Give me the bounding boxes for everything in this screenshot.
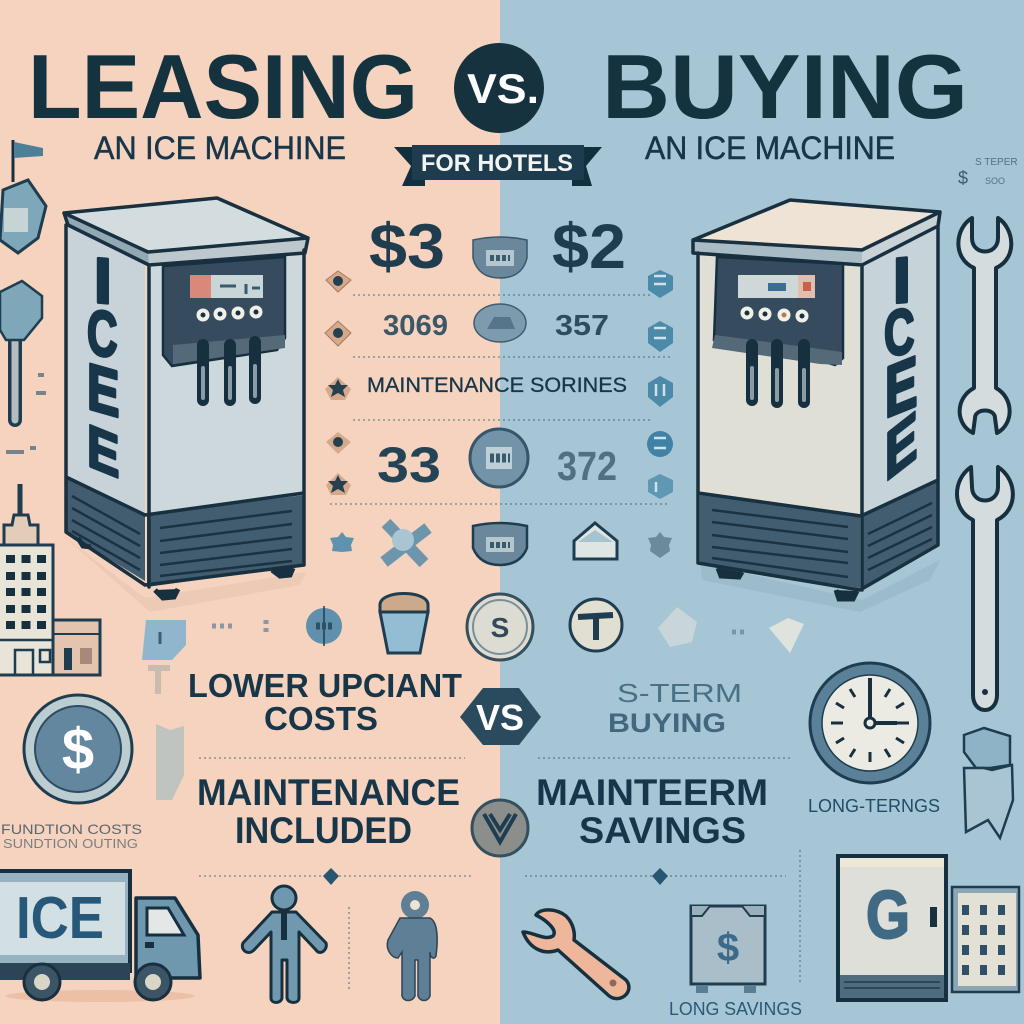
machine label: I [94, 244, 112, 318]
label: maintenance services: MAINTENANCE SORINES [367, 374, 627, 397]
icon: tag [473, 523, 527, 565]
text: maintenance included: MAINTENANCE [197, 772, 460, 813]
subtitle: leasing: AN ICE MACHINE [94, 130, 346, 166]
icon: dollar coin large: $ [62, 717, 94, 782]
icon: tools [384, 523, 428, 563]
machine feet [718, 568, 857, 599]
icon: figure right [964, 728, 1013, 838]
text: long-term buying: BUYING [608, 708, 726, 738]
panel: leasing background [0, 0, 500, 1024]
figure: 33: 33 [377, 437, 441, 493]
badge: vs arrow: VS [476, 697, 524, 738]
machine label: E [885, 341, 917, 434]
caption: top right fine print: $ [958, 168, 968, 188]
caption: long-terms: LONG-TERNGS [808, 796, 940, 816]
icon: coin small [306, 606, 342, 646]
icon: ice chunk [658, 607, 697, 647]
icon: person with tie [242, 886, 326, 1002]
subtitle: buying: AN ICE MACHINE [645, 130, 895, 166]
icon: dollar coin large [24, 695, 132, 803]
icon: emblem [472, 800, 528, 856]
ribbon: for hotels: FOR HOTELS [421, 150, 573, 177]
caption: top right fine print: S TEPER [975, 157, 1018, 168]
machine label: E [885, 395, 917, 497]
ribbon: for hotels [394, 145, 602, 186]
figure: $2: $2 [552, 212, 626, 282]
figure: 372: 372 [557, 443, 617, 489]
icon: pale figure left [156, 724, 184, 800]
caption: long savings: LONG SAVINGS [669, 999, 802, 1019]
icon: clock [810, 663, 930, 783]
icon: cost badge [473, 237, 527, 278]
machine label: I [893, 244, 911, 317]
figure: 3069: 3069 [383, 310, 448, 342]
icon: ice delivery truck: ICE [16, 885, 104, 951]
text: long-term buying [608, 678, 742, 738]
icon: ice delivery truck [0, 871, 200, 1002]
icon: machine g: G [866, 877, 910, 953]
machine label [87, 244, 119, 491]
title: buying: BUYING [602, 37, 968, 138]
machine label: E [87, 411, 119, 491]
icon: valve dial [570, 599, 622, 651]
icons: second row [142, 594, 804, 694]
caption: fine print: FUNDTION COSTS [1, 821, 142, 837]
caption: fine print [1, 821, 142, 851]
icon: dollar coin: S [491, 612, 509, 643]
text: long-term savings: SAVINGS [579, 810, 746, 851]
icon: oval badge [474, 304, 526, 342]
marker: diamonds [323, 868, 668, 885]
icon: wrench lower [957, 467, 1013, 710]
title: leasing: LEASING [28, 37, 418, 138]
machine label: C [87, 296, 118, 371]
comparison: costs [330, 212, 673, 504]
icon: wrench upper [958, 218, 1011, 433]
specks left [6, 375, 46, 452]
text: maintenance included: INCLUDED [235, 810, 412, 851]
text: lower upfront costs [188, 667, 462, 737]
icon: flag pin [0, 140, 46, 253]
control panel [163, 257, 285, 400]
caption: top right fine print: SOO [985, 176, 1005, 186]
text: long-term savings: MAINTEERM [536, 772, 768, 813]
machine label [884, 244, 917, 497]
text: lower upfront costs: LOWER UPCIANT [188, 667, 462, 704]
icon: wrench peach [523, 910, 629, 999]
icon: ice bucket [380, 594, 428, 653]
figure: 357: 357 [555, 310, 609, 342]
illustration: leasing ice machine [62, 198, 308, 612]
machine label: E [87, 350, 119, 432]
specks [212, 620, 748, 632]
icons: row under table [384, 523, 617, 565]
illustration: buying ice machine [693, 200, 940, 612]
icon: person [387, 891, 437, 1000]
icons: side markers left [325, 271, 354, 552]
icon: house [574, 523, 617, 559]
icon: dollar safe: $ [717, 926, 739, 970]
icon: ice chunk small [769, 618, 804, 653]
icon: round badge [470, 429, 528, 487]
machine feet [78, 538, 293, 598]
panel: buying background [500, 0, 1024, 1024]
badge: vs [454, 43, 544, 133]
badge: vs: VS. [467, 65, 539, 112]
text: long-term savings [536, 772, 768, 851]
icon: dollar coin [467, 594, 533, 660]
caption: fine print: SUNDTION OUTING [3, 836, 138, 851]
icon: pale cup [142, 620, 186, 694]
icon: hotel building [0, 484, 100, 675]
icon: machine g [838, 856, 946, 1000]
text: maintenance included [197, 772, 460, 851]
badge: vs arrow [460, 688, 541, 745]
text: lower upfront costs: COSTS [264, 700, 378, 737]
caption: top right fine print [958, 157, 1018, 188]
icon: building right [952, 887, 1019, 992]
icon: ice pick [0, 281, 42, 420]
control panel [712, 257, 843, 402]
text: long-term buying: S-TERM [617, 678, 742, 708]
machine label: C [884, 295, 914, 370]
figure: $3: $3 [369, 212, 445, 282]
icon: dollar safe [691, 906, 765, 993]
icons: side markers right [647, 270, 673, 558]
